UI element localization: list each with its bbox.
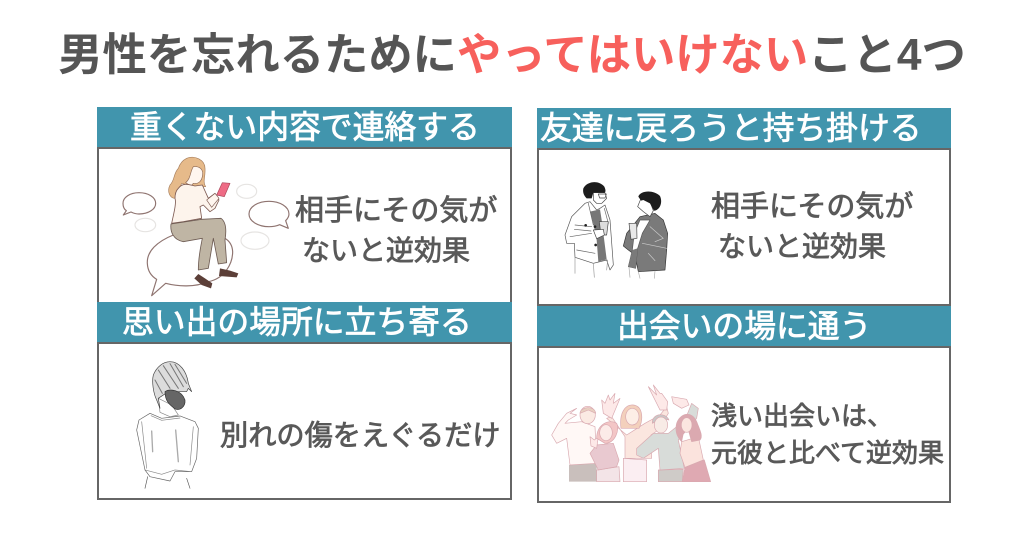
person three (623, 458, 647, 482)
person four (658, 469, 683, 482)
icon: woman from behind (137, 362, 198, 488)
shirt (137, 413, 198, 481)
face (186, 167, 203, 186)
left friend head (593, 193, 607, 203)
hair (169, 157, 206, 198)
hair (153, 362, 192, 408)
left friend jacket (565, 202, 613, 270)
panel body (537, 346, 951, 503)
panel: meeting places (537, 306, 951, 503)
pants (171, 218, 227, 270)
text block (711, 401, 944, 468)
person one (569, 463, 597, 482)
text block: 相手にその気が (295, 195, 497, 227)
text block: 浅い出会いは、 (711, 401, 893, 431)
bun (165, 390, 185, 409)
panel: memory places (97, 302, 512, 500)
panel: back to friends (537, 108, 951, 306)
text block: ないと逆効果 (302, 235, 470, 266)
text block (295, 194, 498, 266)
person two (597, 467, 620, 482)
text block: 相手にその気が (711, 191, 913, 223)
text block (711, 190, 914, 262)
heading (537, 306, 951, 346)
heading: 友達に戻ろうと持ち掛ける (540, 110, 922, 146)
right friend head (638, 198, 653, 217)
icon: friends group (552, 385, 711, 482)
text block: 別れの傷をえぐるだけ (220, 419, 500, 451)
neck (158, 398, 178, 417)
panel body (97, 342, 512, 500)
right friend jacket (623, 213, 668, 272)
text block: 元彼と比べて逆効果 (711, 438, 944, 468)
title: 男性を忘れるためにやってはいけないこと4つ (58, 31, 966, 80)
phone (217, 183, 230, 197)
text block: ないと逆効果 (718, 231, 886, 262)
heading: 出会いの場に通う (617, 308, 871, 344)
shoes (194, 274, 212, 288)
person five (682, 460, 711, 482)
heading: 重くない内容で連絡する (130, 109, 480, 145)
icon: woman on speech bubble (123, 157, 289, 296)
icon: two friends talking (565, 182, 668, 278)
heading: 思い出の場所に立ち寄る (122, 304, 472, 340)
panel: light-contact message (97, 107, 512, 302)
panel body (97, 147, 512, 304)
panel body (537, 148, 951, 306)
sweater (172, 184, 219, 223)
